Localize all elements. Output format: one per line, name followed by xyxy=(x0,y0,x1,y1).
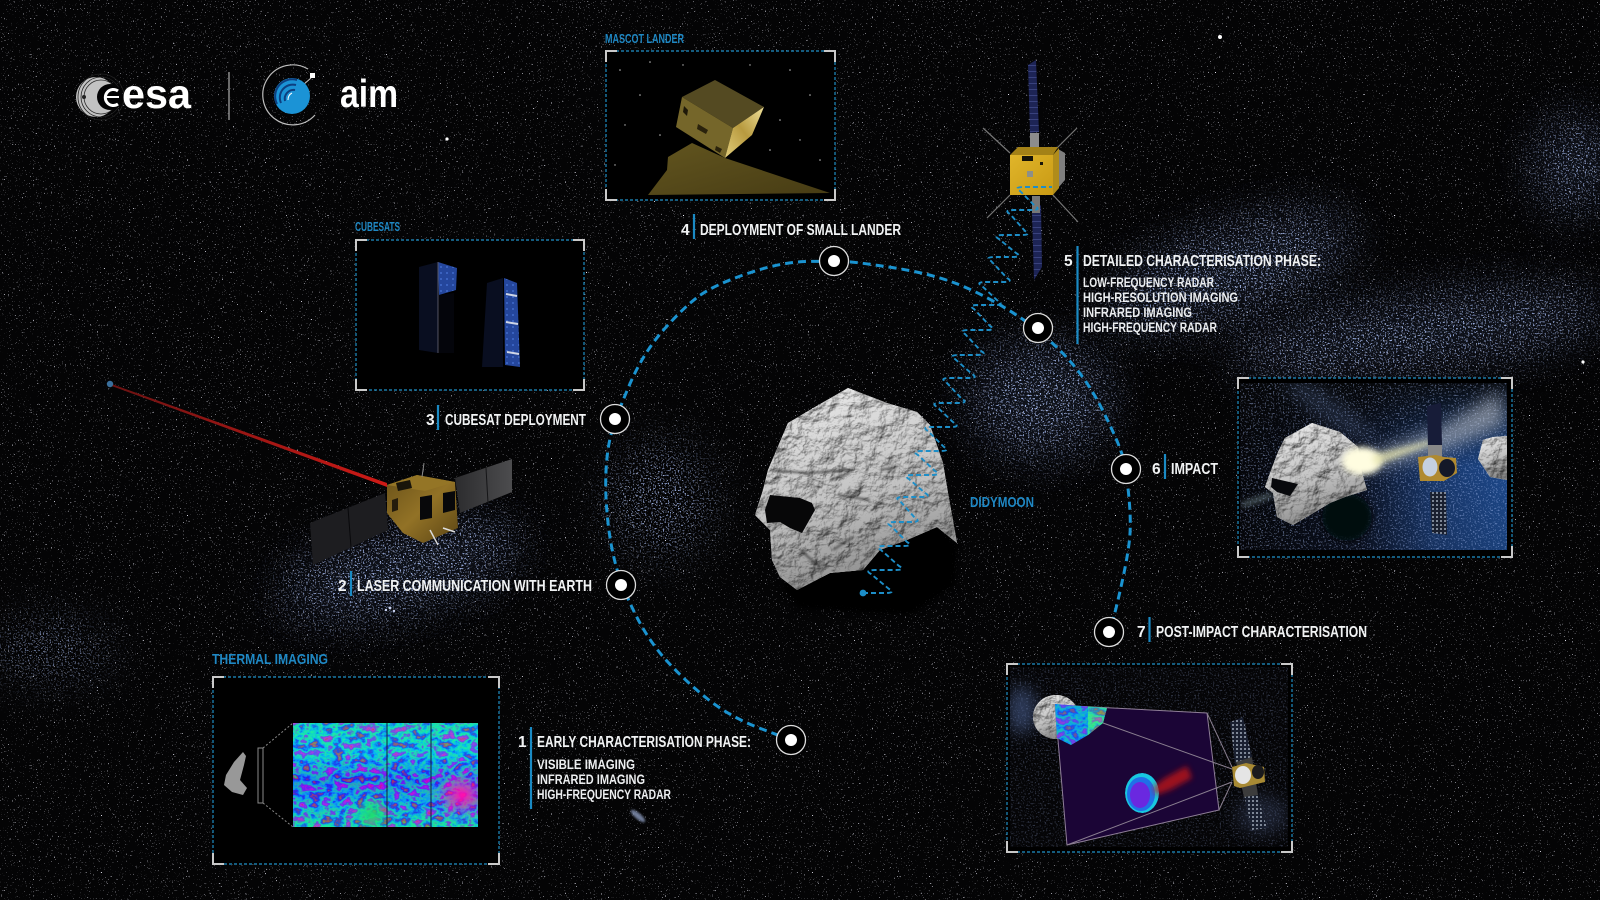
step 6 label: 6 xyxy=(1152,461,1161,478)
lander cube xyxy=(676,80,764,158)
radio wave link xyxy=(863,187,1052,593)
step 4 label xyxy=(681,214,901,239)
step 1 label: EARLY CHARACTERISATION PHASE: xyxy=(537,734,751,751)
step 5 label: DETAILED CHARACTERISATION PHASE: xyxy=(1083,253,1321,270)
step 5 label xyxy=(1064,246,1321,344)
observer spacecraft xyxy=(1230,717,1267,830)
second asteroid xyxy=(1478,436,1507,480)
logo divider xyxy=(228,72,230,120)
panel: thermal imaging xyxy=(212,651,499,864)
post-impact scene xyxy=(1008,667,1288,847)
panel: cubesats xyxy=(355,219,584,390)
lander base xyxy=(648,143,830,195)
step 5 label: 5 xyxy=(1064,253,1073,270)
node 3 xyxy=(600,404,630,434)
node 5 xyxy=(1024,314,1052,342)
colour-mapped asteroid segment xyxy=(1055,704,1107,745)
step 2 label: LASER COMMUNICATION WITH EARTH xyxy=(357,578,592,595)
step 3 label: CUBESAT DEPLOYMENT xyxy=(445,412,586,429)
radio wave start dot xyxy=(860,590,866,596)
panel: impact xyxy=(1238,369,1512,557)
step 7 label xyxy=(1137,617,1367,642)
step 5 label: INFRARED IMAGING xyxy=(1083,305,1192,320)
node 2 xyxy=(606,570,636,600)
node 1 xyxy=(776,726,806,754)
spacecraft: detailed characterisation xyxy=(983,60,1078,280)
impact scene xyxy=(1240,369,1507,550)
spacecraft: laser communication xyxy=(310,459,512,565)
laser beam to Earth xyxy=(107,381,387,487)
imaging frustum xyxy=(258,723,293,827)
step 2 label: 2 xyxy=(338,578,347,595)
step 6 label xyxy=(1152,454,1218,479)
sight lines xyxy=(1067,713,1232,845)
impactor spacecraft xyxy=(1418,403,1457,535)
impact plume xyxy=(1153,766,1192,795)
step 2 label xyxy=(338,571,592,596)
step 1 label: HIGH-FREQUENCY RADAR xyxy=(537,787,671,802)
step 4 label: DEPLOYMENT OF SMALL LANDER xyxy=(700,222,901,239)
node 6 xyxy=(1112,454,1140,484)
asteroid: Didymoon xyxy=(755,388,957,590)
plume haze xyxy=(1362,392,1505,470)
heading: mascot lander: MASCOT LANDER xyxy=(605,31,684,46)
panel: post-impact xyxy=(1007,664,1292,852)
step 3 label: 3 xyxy=(426,412,435,429)
step 7 label: 7 xyxy=(1137,624,1146,641)
cubesat right xyxy=(482,278,520,367)
orbit path xyxy=(606,261,1130,740)
cubesat left xyxy=(419,262,457,353)
step 1 label: VISIBLE IMAGING xyxy=(537,757,635,772)
distant asteroid xyxy=(1033,695,1079,739)
projection plane xyxy=(1055,705,1219,845)
step 1 label: 1 xyxy=(518,734,527,751)
thermal map xyxy=(293,723,478,827)
label: Didymoon: DIDYMOON xyxy=(970,494,1034,511)
step 3 label xyxy=(426,405,586,430)
surface creases xyxy=(770,467,897,567)
colour-mapped moon image xyxy=(1125,773,1159,813)
heading: thermal imaging: THERMAL IMAGING xyxy=(212,651,328,668)
step 5 label: LOW-FREQUENCY RADAR xyxy=(1083,275,1214,290)
small asteroid xyxy=(224,752,247,795)
heading: cubesats: CUBESATS xyxy=(355,219,400,234)
logo: esa xyxy=(76,71,192,120)
step 6 label: IMPACT xyxy=(1171,461,1218,478)
step 5 label: HIGH-RESOLUTION IMAGING xyxy=(1083,290,1238,305)
target asteroid xyxy=(1265,423,1367,525)
step 1 label: INFRARED IMAGING xyxy=(537,772,645,787)
asteroid shadow xyxy=(780,520,957,615)
logo: aim xyxy=(263,65,398,125)
step 4 label: 4 xyxy=(681,222,690,239)
step 5 label: HIGH-FREQUENCY RADAR xyxy=(1083,320,1217,335)
impact flash xyxy=(1342,447,1382,475)
step 1 label xyxy=(518,727,751,809)
node 4 xyxy=(820,246,848,276)
logo: aim: aim xyxy=(340,73,398,116)
step 7 label: POST-IMPACT CHARACTERISATION xyxy=(1156,624,1367,641)
logo: esa: esa xyxy=(122,71,192,117)
node 7 xyxy=(1094,618,1124,646)
panel: mascot lander xyxy=(605,31,835,200)
